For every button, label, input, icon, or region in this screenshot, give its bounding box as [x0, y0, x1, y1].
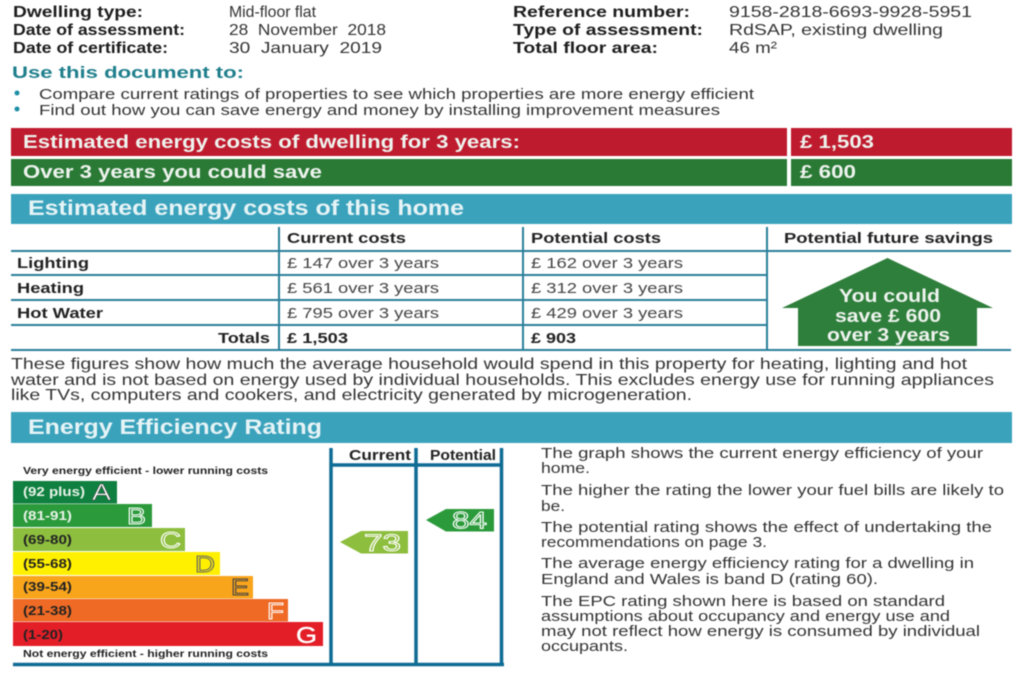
certificate details: Dwelling type:	[13, 4, 143, 21]
band D: (55-68)	[23, 556, 72, 571]
text block: rating explanation: The potential rating shows the effect of undertaking the	[541, 519, 992, 536]
icon: savings house arrow: save £ 600	[835, 306, 941, 326]
band F: (21-38)	[23, 603, 72, 618]
panel: energy costs table: £ 903	[531, 330, 576, 347]
panel: energy costs table: £ 561 over 3 years	[287, 280, 439, 297]
text block: rating explanation: may not reflect how energy is consumed by individual	[541, 623, 980, 640]
band A: A	[92, 479, 112, 505]
icon: savings house arrow: over 3 years	[827, 325, 950, 345]
text block: rating explanation: The average energy efficiency rating for a dwelling in	[541, 555, 974, 572]
panel: energy costs table: Current costs	[287, 230, 406, 247]
panel: energy costs table: £ 162 over 3 years	[531, 255, 683, 272]
panel: estimated costs banner	[11, 128, 1012, 156]
text block: rating explanation: recommendations on page 3.	[541, 534, 767, 551]
certificate details: Total floor area:	[513, 40, 658, 57]
potential rating arrow: 84	[426, 508, 494, 534]
panel: energy costs table: £ 147 over 3 years	[287, 255, 439, 272]
band D	[13, 551, 220, 577]
certificate details	[13, 4, 972, 57]
panel: energy costs table: Potential costs	[531, 230, 661, 247]
chart frame: current and potential columns: Current	[349, 447, 411, 464]
text block: rating explanation	[541, 445, 1004, 655]
text block: rating explanation: England and Wales is band D (rating 60).	[541, 571, 878, 588]
panel: estimated costs banner: Estimated energy costs of dwelling for 3 years:	[23, 131, 520, 152]
text block: cost explanation	[10, 356, 994, 404]
certificate details: 9158-2818-6693-9928-5951	[729, 4, 972, 21]
panel: savings banner	[11, 159, 1012, 186]
icon: savings house arrow: You could	[839, 286, 940, 306]
panel: energy costs table: Potential future savings	[784, 230, 993, 247]
certificate details: 28 November 2018	[229, 22, 386, 39]
heading: estimated energy costs of this home	[11, 194, 1012, 224]
panel: estimated costs banner: £ 1,503	[800, 131, 874, 152]
band E: (39-54)	[23, 579, 72, 594]
text block: rating explanation: occupants.	[541, 638, 628, 655]
panel: savings banner: Over 3 years you could save	[23, 161, 322, 182]
panel: energy costs table	[11, 227, 1011, 351]
text block: rating explanation: The higher the rating the lower your fuel bills are likely to	[541, 482, 1004, 499]
text block: rating explanation: home.	[541, 460, 590, 477]
panel: energy costs table: £ 312 over 3 years	[531, 280, 683, 297]
band A	[13, 479, 117, 505]
panel: energy costs table: Lighting	[17, 255, 89, 272]
text block: rating explanation: The graph shows the current energy efficiency of your	[541, 445, 983, 462]
bullet list	[14, 86, 755, 119]
chart frame: current and potential columns	[13, 447, 504, 664]
text block: cost explanation: These figures show how much the average household would spend in this property for heating, lighting and hot	[11, 356, 968, 373]
band G: G	[296, 622, 317, 648]
heading: energy efficiency rating: Energy Efficiency Rating	[28, 416, 322, 439]
panel: savings banner: £ 600	[800, 161, 856, 182]
band G	[13, 622, 323, 648]
current rating arrow: 73: 73	[364, 530, 401, 557]
band C: C	[160, 527, 181, 553]
certificate details: Mid-floor flat	[229, 4, 317, 21]
band C: (69-80)	[23, 532, 72, 547]
band B	[13, 503, 152, 529]
certificate details: Reference number:	[513, 4, 690, 21]
band F	[13, 598, 288, 624]
text block: rating explanation: The EPC rating shown here is based on standard	[541, 593, 945, 610]
panel: energy costs table: Totals	[218, 330, 270, 347]
band E: E	[231, 574, 249, 600]
certificate details: Date of certificate:	[13, 40, 168, 57]
bullet list: Find out how you can save energy and money by installing improvement measures	[39, 102, 720, 119]
chart frame: current and potential columns: Potential	[430, 447, 496, 464]
heading: energy efficiency rating	[11, 412, 1012, 443]
text block: rating explanation: be.	[541, 498, 565, 515]
heading: estimated energy costs of this home: Estimated energy costs of this home	[28, 197, 464, 220]
certificate details: RdSAP, existing dwelling	[729, 22, 943, 39]
heading: use this document to: Use this document to:	[12, 63, 244, 82]
text block: rating explanation: assumptions about occupancy and energy use and	[541, 608, 950, 625]
band E	[13, 574, 253, 600]
band B: (81-91)	[23, 508, 72, 523]
text block: cost explanation: like TVs, computers and cookers, and electricity generated by microgeneration.	[11, 387, 692, 404]
panel: energy costs table: Hot Water	[17, 305, 103, 322]
band G: (1-20)	[23, 627, 63, 642]
panel: energy costs table: £ 795 over 3 years	[287, 305, 439, 322]
caption: very efficient: Very energy efficient - lower running costs	[23, 466, 269, 477]
current rating arrow: 73	[340, 530, 408, 557]
certificate details: Date of assessment:	[13, 22, 185, 39]
band D: D	[195, 551, 215, 577]
band C	[13, 527, 185, 553]
caption: not efficient: Not energy efficient - higher running costs	[23, 649, 269, 660]
panel: energy costs table: £ 429 over 3 years	[531, 305, 683, 322]
band F: F	[267, 598, 284, 624]
panel: energy costs table: Heating	[17, 280, 84, 297]
band B: B	[127, 503, 146, 529]
icon: savings house arrow	[782, 258, 993, 346]
certificate details: 30 January 2019	[229, 40, 382, 57]
bullet list: Compare current ratings of properties to see which properties are more energy efficient	[39, 86, 755, 103]
chart: energy efficiency rating bands	[13, 466, 323, 660]
potential rating arrow: 84: 84	[452, 508, 487, 534]
band A: (92 plus)	[23, 484, 85, 499]
certificate details: Type of assessment:	[513, 22, 703, 39]
panel: energy costs table: £ 1,503	[287, 330, 348, 347]
text block: cost explanation: water and is not based on energy used by individual households. This excludes energy use for running appliances	[10, 372, 994, 389]
certificate details: 46 m²	[729, 40, 778, 57]
